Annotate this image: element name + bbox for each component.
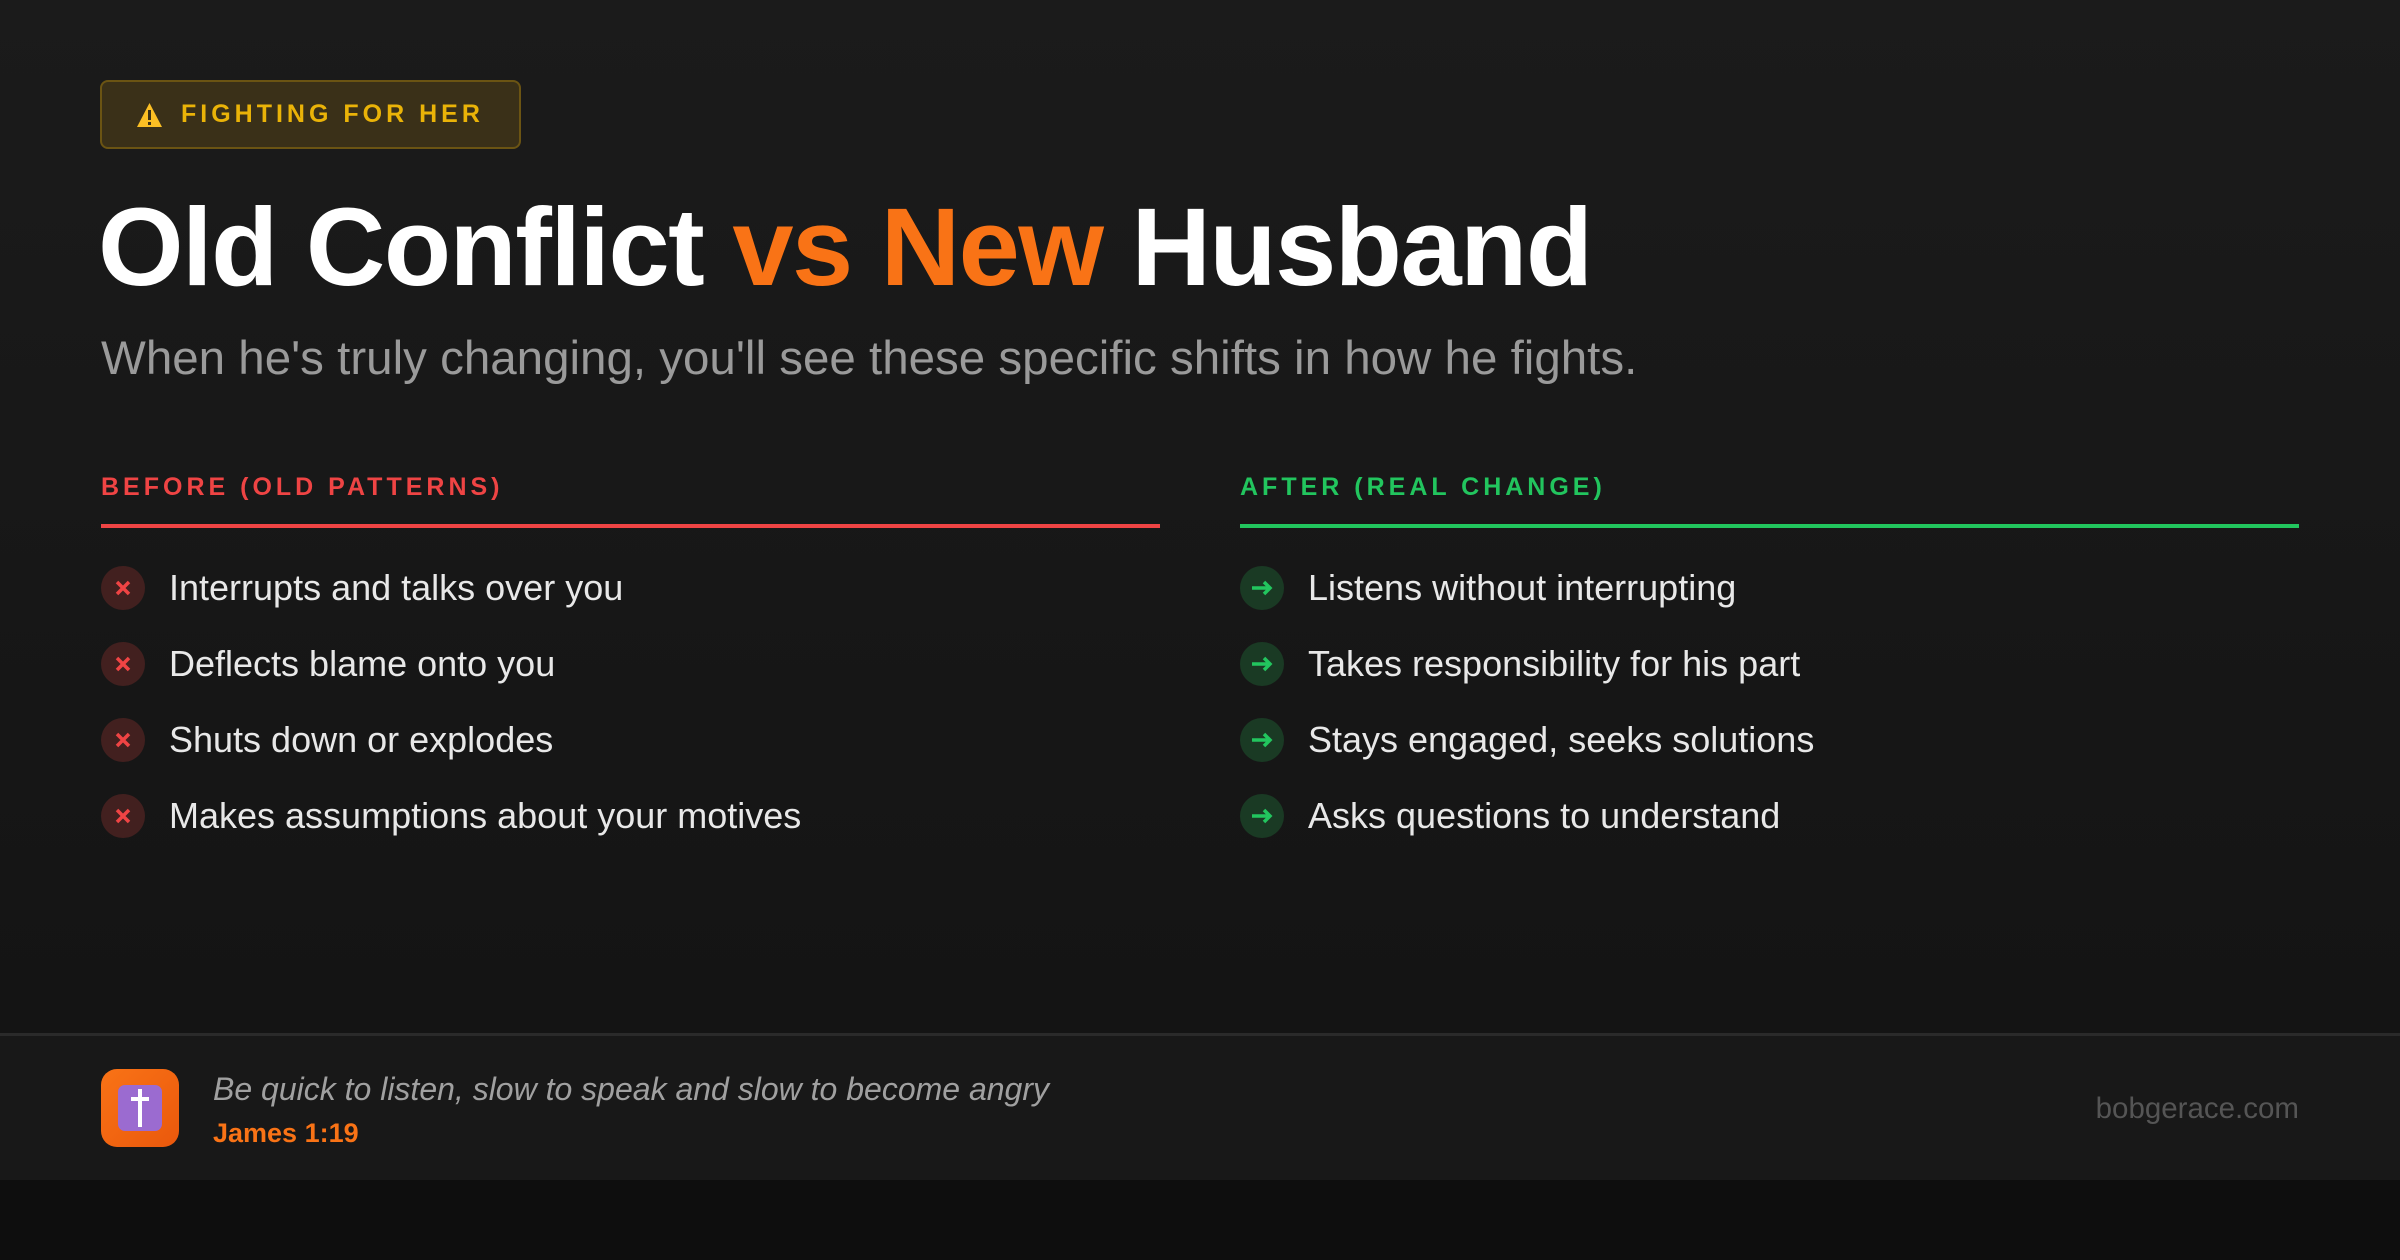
subtitle: When he's truly changing, you'll see these specific shifts in how he fights. bbox=[101, 332, 1637, 385]
item 3: Stays engaged, seeks solutions bbox=[1308, 719, 1814, 760]
heading: after: AFTER (REAL CHANGE) bbox=[1240, 473, 1606, 501]
item 1: Interrupts and talks over you bbox=[169, 567, 623, 608]
heading: before: BEFORE (OLD PATTERNS) bbox=[101, 473, 504, 501]
website: bobgerace.com bbox=[2096, 1092, 2299, 1125]
reference: James 1:19 bbox=[213, 1118, 359, 1148]
item 1: Listens without interrupting bbox=[1308, 567, 1736, 608]
heading: after bbox=[1240, 473, 2299, 528]
item 3: Shuts down or explodes bbox=[169, 719, 553, 760]
heading: before bbox=[101, 473, 1160, 528]
item 2: Deflects blame onto you bbox=[169, 643, 555, 684]
item 4: Makes assumptions about your motives bbox=[169, 795, 801, 836]
footer bbox=[0, 1033, 2400, 1180]
icon: cross bbox=[101, 1069, 179, 1147]
item 2: Takes responsibility for his part bbox=[1308, 643, 1800, 684]
title: Old Conflict vs New Husband bbox=[98, 186, 1592, 309]
badge: fighting for her: FIGHTING FOR HER bbox=[181, 100, 484, 128]
quote: Be quick to listen, slow to speak and slow to become angry bbox=[213, 1071, 1049, 1107]
badge: fighting for her bbox=[100, 80, 521, 149]
item 4: Asks questions to understand bbox=[1308, 795, 1780, 836]
panel: after bbox=[1240, 473, 2299, 838]
panel: before bbox=[101, 473, 1160, 838]
